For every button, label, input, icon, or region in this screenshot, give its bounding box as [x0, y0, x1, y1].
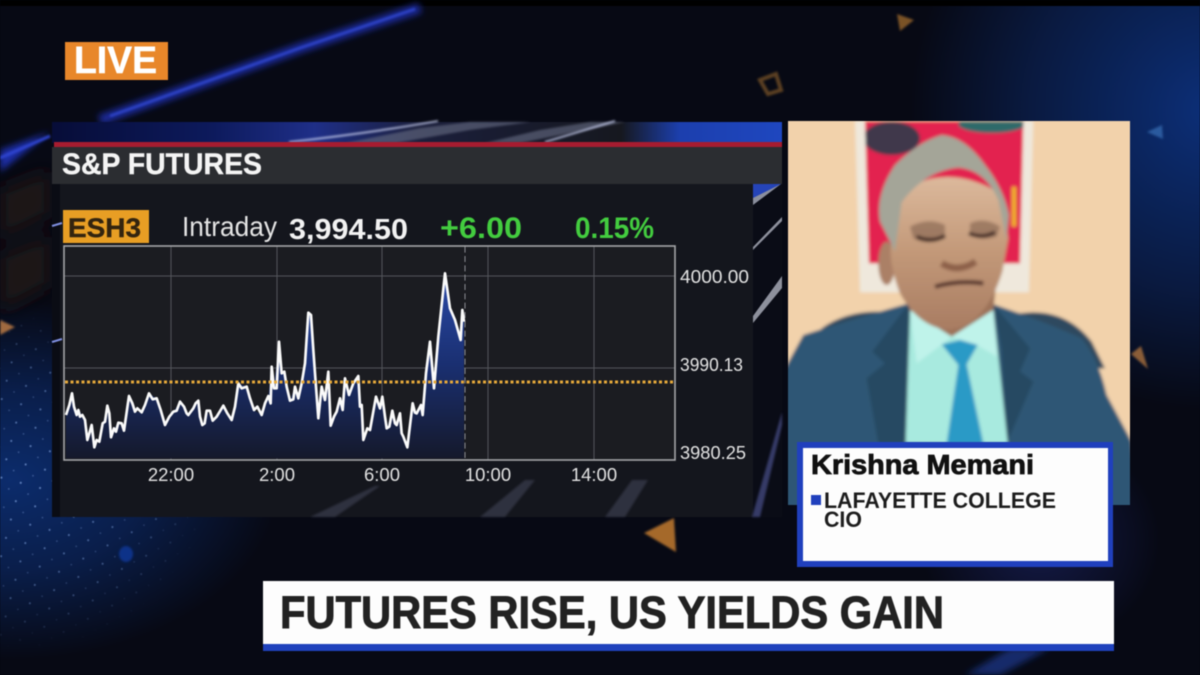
decorative diamond marker [760, 74, 781, 94]
ticker label: ESH3 [68, 213, 141, 243]
x axis labels: 22:00 [148, 464, 194, 485]
ear [878, 242, 895, 285]
guest video: Krishna Memani [787, 120, 1131, 506]
red header rule [54, 142, 782, 147]
chair back [805, 312, 1105, 368]
decorative blue triangle right [1147, 125, 1163, 139]
panel left light streaks [52, 223, 62, 342]
decorative triangle top right [897, 14, 914, 31]
wall [787, 120, 1131, 452]
heading: S&P Futures: S&P FUTURES [62, 148, 262, 181]
panel strip highlights [345, 122, 625, 143]
diagonal stripes [753, 217, 782, 323]
nose shadow [942, 262, 976, 268]
shirt [906, 310, 1008, 443]
eyes [917, 232, 995, 240]
line chart [64, 246, 675, 460]
current price: 3,994.50 [289, 214, 408, 246]
lower third: guest name card [797, 442, 1113, 567]
guest role: CIO [824, 507, 862, 532]
decorative orange triangle lower [644, 518, 676, 552]
jacket shadow lapels [867, 303, 1033, 443]
top blue patch [753, 184, 781, 198]
mouth [935, 282, 983, 287]
right side navy column [753, 184, 782, 517]
headline banner [263, 581, 1114, 651]
neck [908, 290, 997, 338]
y axis labels: 3990.13 [680, 354, 743, 375]
right side diagonal stripes [753, 184, 781, 205]
decorative orange triangle right [1131, 346, 1148, 369]
panel left dark band [52, 184, 60, 517]
necktie [942, 340, 983, 443]
x axis labels: 6:00 [364, 464, 400, 485]
y axis labels: 4000.00 [680, 266, 749, 287]
x axis labels: 10:00 [465, 464, 511, 485]
strip light streaks [289, 121, 615, 142]
intraday label: Intraday [182, 211, 277, 242]
panel: S&P futures chart [52, 121, 782, 517]
x axis labels: 14:00 [571, 464, 617, 485]
framed artwork [855, 116, 1033, 292]
collar [910, 310, 997, 363]
hair [879, 135, 1009, 252]
face [891, 177, 1008, 330]
header bar [52, 147, 782, 184]
headline text: FUTURES RISE, US YIELDS GAIN [280, 587, 944, 638]
blue bullet [811, 495, 821, 505]
x axis labels [148, 464, 617, 485]
percentage change: 0.15% [575, 212, 654, 245]
panel top strip [52, 122, 782, 143]
guest organisation: LAFAYETTE COLLEGE [824, 488, 1056, 513]
y axis labels: 3980.25 [680, 442, 746, 463]
suit jacket [787, 302, 1131, 506]
y axis labels [680, 266, 749, 463]
decorative orange triangle left [0, 320, 15, 335]
lower diagonal stripes [310, 480, 648, 517]
guest name: Krishna Memani [811, 449, 1034, 480]
price change: +6.00 [440, 212, 522, 245]
live badge: LIVE [74, 40, 157, 82]
chart body background [52, 184, 753, 517]
eye shadows [910, 221, 1000, 242]
lower right blue streak [752, 412, 782, 517]
x axis labels: 2:00 [259, 464, 295, 485]
